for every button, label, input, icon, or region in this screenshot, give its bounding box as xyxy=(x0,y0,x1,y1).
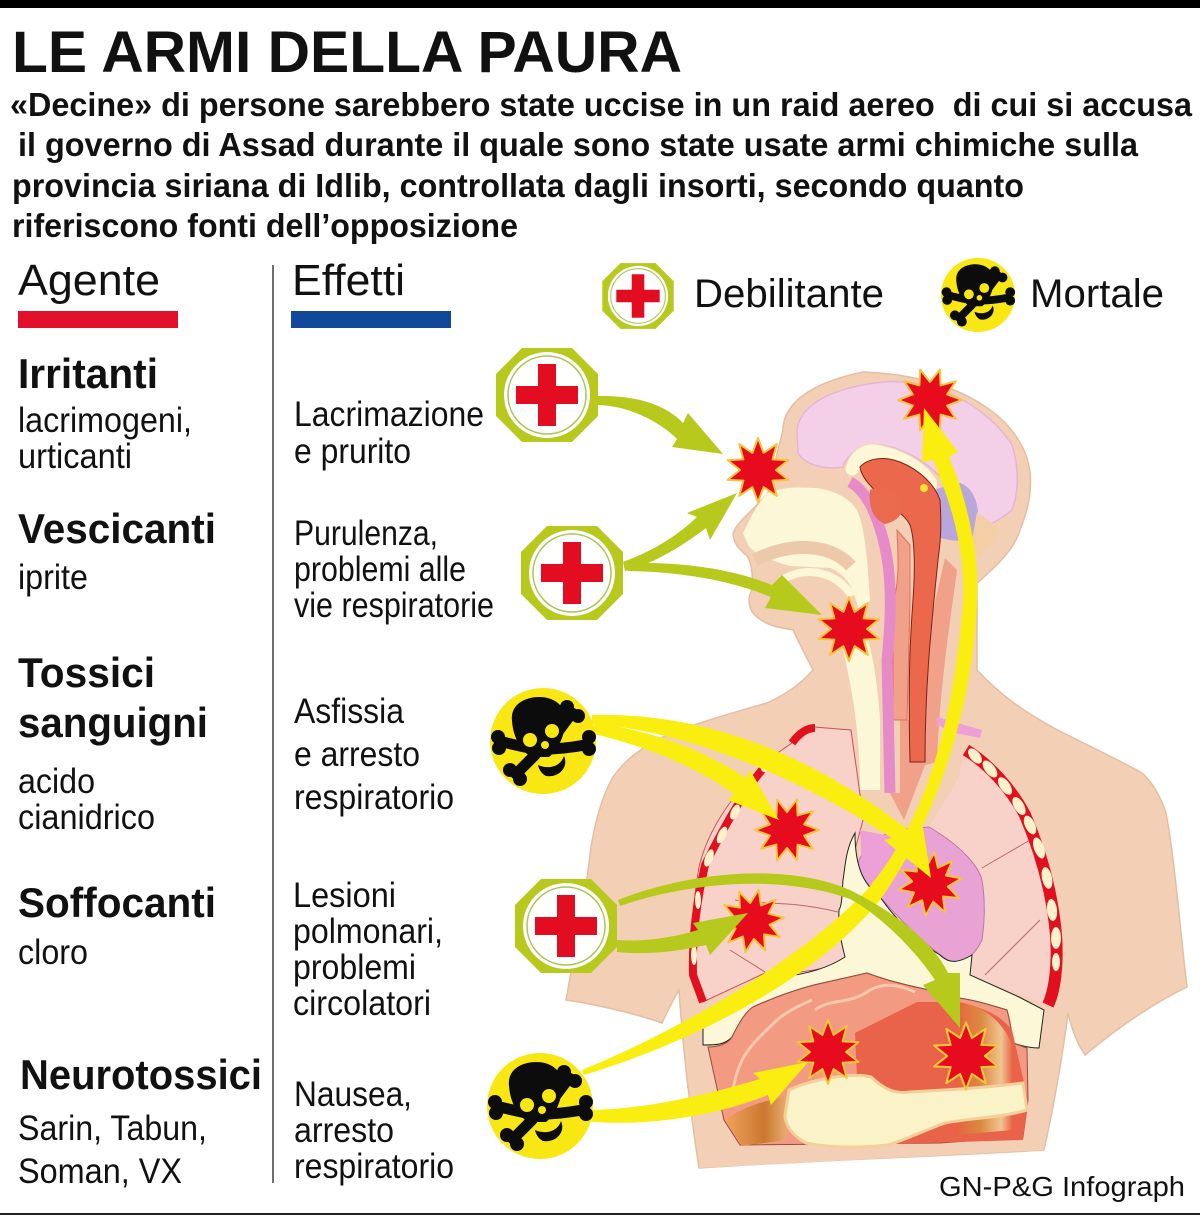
agent: Irritanti: lacrimogeni, xyxy=(18,401,192,440)
title: LE ARMI DELLA PAURA xyxy=(12,20,682,85)
agent: Tossici sanguigni: Tossici xyxy=(18,649,155,696)
right lung membrane xyxy=(966,750,1057,1005)
agent: Neurotossici: Neurotossici xyxy=(20,1051,262,1098)
effect: Purulenza: vie respiratorie xyxy=(294,586,494,625)
stomach xyxy=(855,1002,1028,1145)
arrow: green to eyes xyxy=(598,396,723,454)
skin bottom strip xyxy=(699,1140,1044,1168)
intro text block: provincia siriana di Idlib, controllata dagli insorti, secondo quanto xyxy=(12,167,1024,204)
effect: Purulenza xyxy=(294,514,494,625)
agent: Irritanti: urticanti xyxy=(18,437,132,476)
skin silhouette xyxy=(566,372,1187,1168)
left lung membrane xyxy=(693,728,815,1002)
effect: Nausea xyxy=(294,1075,454,1186)
airway tract xyxy=(860,459,941,762)
arrow: skull to liver xyxy=(585,1062,808,1123)
nasal cavity xyxy=(743,487,870,618)
agent: Soffocanti: cloro xyxy=(18,933,88,972)
agent: Soffocanti: Soffocanti xyxy=(18,879,216,926)
effect: Lesioni polmonari: Lesioni xyxy=(293,876,396,915)
agent: Neurotossici: Soman, VX xyxy=(18,1152,182,1191)
tonsil xyxy=(870,488,903,524)
effect: Purulenza: problemi alle xyxy=(294,550,466,589)
gland mark xyxy=(920,484,928,492)
icon: debilitating, choking agents xyxy=(515,879,617,973)
left rib markers xyxy=(691,756,775,965)
hit marker: stomach xyxy=(934,1022,998,1090)
salmon left tract xyxy=(893,530,910,720)
effect: Asfissia xyxy=(294,692,454,817)
agent: Vescicanti: iprite xyxy=(18,558,88,597)
hit marker: liver xyxy=(798,1020,858,1084)
hit marker: lower lung xyxy=(716,883,788,959)
effect: Lacrimazione e prurito: e prurito xyxy=(294,432,411,471)
arrow: skull to heart xyxy=(592,715,931,878)
palate band xyxy=(755,548,851,566)
hit marker: brain xyxy=(891,360,969,440)
column heading: Agente: Agente xyxy=(18,256,160,305)
arrow: green to nose xyxy=(623,493,737,571)
hit marker: eyes xyxy=(728,438,788,502)
top rule xyxy=(0,0,1200,8)
icon: lethal, nerve agents xyxy=(487,1053,593,1159)
agent: Tossici sanguigni: sanguigni xyxy=(18,699,208,746)
heart xyxy=(857,827,984,963)
agent: Neurotossici xyxy=(18,1051,262,1191)
effect: Asfissia: e arresto xyxy=(294,735,420,774)
arrow: yellow to brain xyxy=(582,408,977,1075)
arrow: green to throat xyxy=(628,563,822,615)
column heading: Effetti xyxy=(291,256,451,328)
effect: Asfissia: Asfissia xyxy=(294,692,404,731)
agent: Irritanti: Irritanti xyxy=(18,350,158,397)
agent: Tossici sanguigni xyxy=(18,649,208,837)
intro text block: riferiscono fonti dell’opposizione xyxy=(12,207,518,244)
pancreas xyxy=(785,1075,1027,1147)
cerebellum xyxy=(932,483,978,541)
pituitary lobe xyxy=(972,512,1000,558)
lower left organ xyxy=(725,1095,790,1146)
arrow: green to stomach xyxy=(618,873,960,1028)
hit marker: heart xyxy=(895,848,965,920)
arrow: skull to lung xyxy=(594,723,779,820)
gall region xyxy=(955,1002,1013,1135)
effect: Lacrimazione e prurito: Lacrimazione xyxy=(294,395,484,434)
mouth arc xyxy=(782,572,852,596)
intro text block: il governo di Assad durante il quale sono state usate armi chimiche sulla xyxy=(18,126,1139,163)
icon: lethal, blood agents xyxy=(490,688,596,794)
brain xyxy=(797,382,1017,530)
effect: Asfissia: respiratorio xyxy=(294,778,454,817)
effect: Lesioni polmonari: problemi xyxy=(293,948,416,987)
effect: Lesioni polmonari xyxy=(293,876,443,1023)
icon: debilitating, vesicants xyxy=(521,526,623,620)
right rib markers xyxy=(965,746,1061,971)
pink vessel xyxy=(860,830,895,880)
effect: Lesioni polmonari: polmonari, xyxy=(293,912,443,951)
agent: Irritanti xyxy=(18,350,192,476)
column heading: Effetti: Effetti xyxy=(292,256,405,305)
legend: Mortale: Mortale xyxy=(1030,272,1164,316)
right lung xyxy=(929,747,1058,1005)
soft palate dome xyxy=(845,444,938,494)
legend: Debilitante xyxy=(602,263,884,329)
credit: GN-P&G Infograph xyxy=(939,1171,1185,1202)
salmon right tract xyxy=(890,558,957,820)
effect: Nausea: arresto xyxy=(294,1111,394,1150)
abdomen xyxy=(708,973,1028,1145)
left lung xyxy=(691,727,863,1002)
legend: Mortale xyxy=(941,258,1164,332)
agent: Tossici sanguigni: cianidrico xyxy=(18,798,155,837)
hit marker: left lung xyxy=(748,790,826,870)
agent: Tossici sanguigni: acido xyxy=(18,762,95,801)
effect: Purulenza: Purulenza, xyxy=(294,514,438,553)
column heading: Agente xyxy=(18,256,178,328)
icon: debilitating, irritants xyxy=(496,348,598,442)
effect: Lacrimazione e prurito xyxy=(294,395,484,471)
mediastinum and diaphragm xyxy=(703,833,1044,1048)
arrow: green to lower lung xyxy=(617,913,748,955)
agent: Vescicanti: Vescicanti xyxy=(18,505,216,552)
effect: Nausea: respiratorio xyxy=(294,1147,454,1186)
neck vessel mark xyxy=(937,717,982,738)
pink vertebral lining xyxy=(850,482,890,793)
agent: Soffocanti xyxy=(18,879,216,972)
anatomy illustration xyxy=(566,372,1187,1168)
lung lobe lines xyxy=(730,840,1040,975)
intro text block xyxy=(10,86,1193,244)
liver highlights xyxy=(732,985,915,1095)
effect: Lesioni polmonari: circolatori xyxy=(293,984,431,1023)
agent: Neurotossici: Sarin, Tabun, xyxy=(18,1109,207,1148)
bottom rule xyxy=(0,1213,1200,1215)
throat tube xyxy=(843,640,880,790)
intro text block: «Decine» di persone sarebbero state uccise in un raid aereo di cui si accusa xyxy=(10,86,1193,123)
agent: Vescicanti xyxy=(18,505,216,597)
legend: Debilitante: Debilitante xyxy=(694,272,884,316)
effect: Nausea: Nausea, xyxy=(294,1075,412,1114)
hit marker: throat xyxy=(819,597,879,661)
column divider xyxy=(272,265,274,1183)
